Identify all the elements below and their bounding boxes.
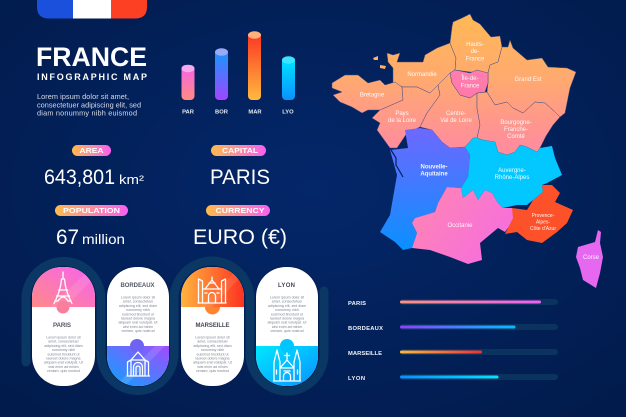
card text: adipiscing elit, sed diam [193, 344, 232, 348]
card text: euismod tincidunt ut [122, 312, 154, 316]
bar: Paris: PARIS [348, 301, 366, 307]
region: Corse [576, 230, 603, 288]
region: Nouvelle-Aquitaine [380, 128, 470, 250]
region: Occitanie [412, 187, 515, 264]
card text: adipiscing elit, sed diam [44, 344, 83, 348]
card text [268, 296, 306, 333]
card text: Lorem ipsum dolor sit [46, 336, 81, 340]
card text: amet, consectetuer [123, 300, 154, 304]
icon: Marseille monument [198, 277, 226, 303]
icon: Lyon basilica [274, 350, 300, 381]
stat: capital: PARIS [210, 165, 270, 189]
icon: Bordeaux monument [127, 352, 150, 376]
stat: capital: CAPITAL [222, 146, 258, 155]
bar: Bordeaux: BORDEAUX [348, 326, 383, 332]
map labels: Corse [583, 255, 600, 261]
region: Hauts-de-France [450, 14, 502, 73]
bar labels: PAR [182, 110, 195, 116]
map labels: Franche- [504, 127, 528, 133]
intro text: Lorem ipsum dolor sit amet, [37, 92, 129, 101]
bar: Paris [182, 65, 194, 100]
region: Provence-Alpes-Côte d'Azur [505, 185, 573, 243]
stat: area [44, 145, 144, 189]
bump [130, 339, 144, 353]
map labels [360, 42, 600, 261]
card text: nonummy nibh [201, 348, 224, 352]
intro text: consectetuer adipiscing elit, sed [37, 100, 141, 110]
bar labels [182, 110, 294, 116]
card: Marseille [180, 266, 250, 386]
card: Paris: PARIS [53, 322, 71, 329]
intro text [37, 92, 141, 118]
stat: currency: CURRENCY [216, 206, 264, 215]
map of France [332, 14, 603, 288]
card text: euismod tincidunt ut [271, 312, 303, 316]
card text: nonummy nibh [275, 308, 299, 312]
card text [119, 296, 157, 333]
region: Bourgogne-Franche-Comté [477, 92, 560, 155]
stat: population: POPULATION [63, 206, 120, 215]
region: Auvergne-Rhône-Alpes [461, 138, 562, 208]
bump [56, 300, 70, 314]
region: Île-de-France [450, 70, 488, 98]
map labels: Hauts- [466, 42, 484, 48]
card text: Lorem ipsum dolor sit [270, 296, 304, 300]
region: Normandie [387, 43, 456, 93]
stat: currency: EURO (€) [193, 225, 287, 249]
card text: wisi enim ad minim [197, 365, 228, 369]
card text: wisi enim ad minim [48, 365, 79, 369]
map labels: Rhône-Alpes [495, 175, 529, 181]
bump [205, 307, 220, 314]
stat: area: 643,801 [44, 166, 115, 189]
progress bars [348, 299, 558, 382]
bar: Lyon [348, 374, 558, 382]
map labels: Provence- [532, 213, 555, 219]
bar: Paris [348, 299, 558, 307]
map labels: Côte d'Azur [530, 226, 556, 232]
region: Pays de la Loire [372, 85, 440, 148]
map labels: Nouvelle- [420, 164, 448, 170]
card: Lyon [256, 266, 318, 386]
card text: aliquam erat volutpat. Ut [193, 361, 232, 365]
icon: Eiffel tower [54, 272, 72, 304]
card text: laoreet dolore magna [270, 316, 304, 320]
card text: amet, consectetuer [48, 340, 80, 344]
card text: aliquam erat volutpat. Ut [268, 321, 306, 325]
stat: population: 67 [56, 226, 79, 249]
map labels: Val de Loire [440, 118, 472, 124]
card: Lyon: LYON [278, 283, 295, 289]
bar: Marseille [348, 349, 558, 357]
card text: nonummy nibh [52, 348, 75, 352]
card text [44, 336, 83, 373]
bar labels: MAR [248, 110, 262, 116]
region: Centre-Val de Loire [420, 73, 480, 148]
cylinder chart [182, 31, 295, 116]
bar: Bordeaux [348, 324, 558, 332]
map labels: Centre- [446, 111, 466, 117]
stat: currency [193, 205, 287, 249]
map labels: de la Loire [388, 118, 417, 124]
bump [280, 339, 294, 353]
card text [193, 336, 232, 373]
stat: area: AREA [80, 146, 104, 155]
title: INFOGRAPHIC MAP [37, 72, 147, 82]
card text: euismod tincidunt ut [197, 352, 228, 356]
card text: adipiscing elit, sed diam [119, 304, 157, 308]
bar: Marseille [248, 31, 261, 100]
stat: area: km² [119, 173, 144, 187]
map labels: Occitanie [447, 223, 473, 229]
card: Bordeaux: BORDEAUX [120, 283, 154, 289]
card text: aliquam erat volutpat. Ut [44, 361, 83, 365]
serpentine band behind cards [26, 261, 324, 391]
map labels: Bretagne [360, 92, 385, 98]
card text: veniam, quis nostrud [196, 369, 229, 373]
map labels: Bourgogne- [500, 120, 532, 126]
stat: capital [210, 145, 270, 189]
bar labels: LYO [282, 110, 294, 116]
islands and estuaries [373, 56, 403, 177]
bar: Lyon: LYON [348, 376, 365, 382]
card text: wisi enim ad minim [272, 325, 302, 329]
card text: amet, consectetuer [272, 300, 303, 304]
card text: Lorem ipsum dolor sit [121, 296, 155, 300]
card text: laoreet dolore magna [196, 356, 229, 360]
region: Bretagne [332, 75, 403, 113]
bar: Bordeaux [215, 48, 228, 100]
card text: wisi enim ad minim [123, 325, 153, 329]
card text: euismod tincidunt ut [48, 352, 79, 356]
map labels: Pays [395, 111, 409, 117]
card text: laoreet dolore magna [47, 356, 80, 360]
map labels: France [466, 56, 485, 62]
card: Bordeaux [106, 266, 170, 386]
map labels: France [461, 84, 480, 90]
title: FRANCE [36, 42, 147, 72]
card text: laoreet dolore magna [121, 316, 155, 320]
stat: population: million [82, 231, 125, 247]
card text: veniam, quis nostrud [121, 329, 155, 333]
map labels: Grand Est [514, 77, 542, 83]
card: Marseille: MARSEILLE [196, 323, 230, 329]
map labels: Auvergne- [498, 168, 526, 174]
bar: Marseille: MARSEILLE [348, 351, 382, 357]
map labels: Alpes- [536, 220, 550, 226]
map labels: Île-de- [460, 75, 479, 82]
map labels: Comté [507, 134, 525, 140]
map labels: Aquitaine [420, 172, 448, 178]
flag [37, 0, 147, 18]
card text: aliquam erat volutpat. Ut [119, 321, 157, 325]
card text: adipiscing elit, sed diam [268, 304, 306, 308]
card text: veniam, quis nostrud [47, 369, 80, 373]
region: Grand Est [487, 40, 576, 117]
card text: Lorem ipsum dolor sit [195, 336, 230, 340]
card text: amet, consectetuer [197, 340, 229, 344]
bar: Lyon [282, 56, 295, 100]
stat: population [55, 205, 128, 249]
map labels: Normandie [407, 72, 437, 78]
bar labels: BOR [215, 110, 229, 116]
intro text: diam nonummy nibh euismod [37, 108, 137, 118]
card text: nonummy nibh [126, 308, 150, 312]
map labels: de- [471, 49, 479, 55]
card: Paris [32, 266, 96, 386]
card text: veniam, quis nostrud [270, 329, 304, 333]
